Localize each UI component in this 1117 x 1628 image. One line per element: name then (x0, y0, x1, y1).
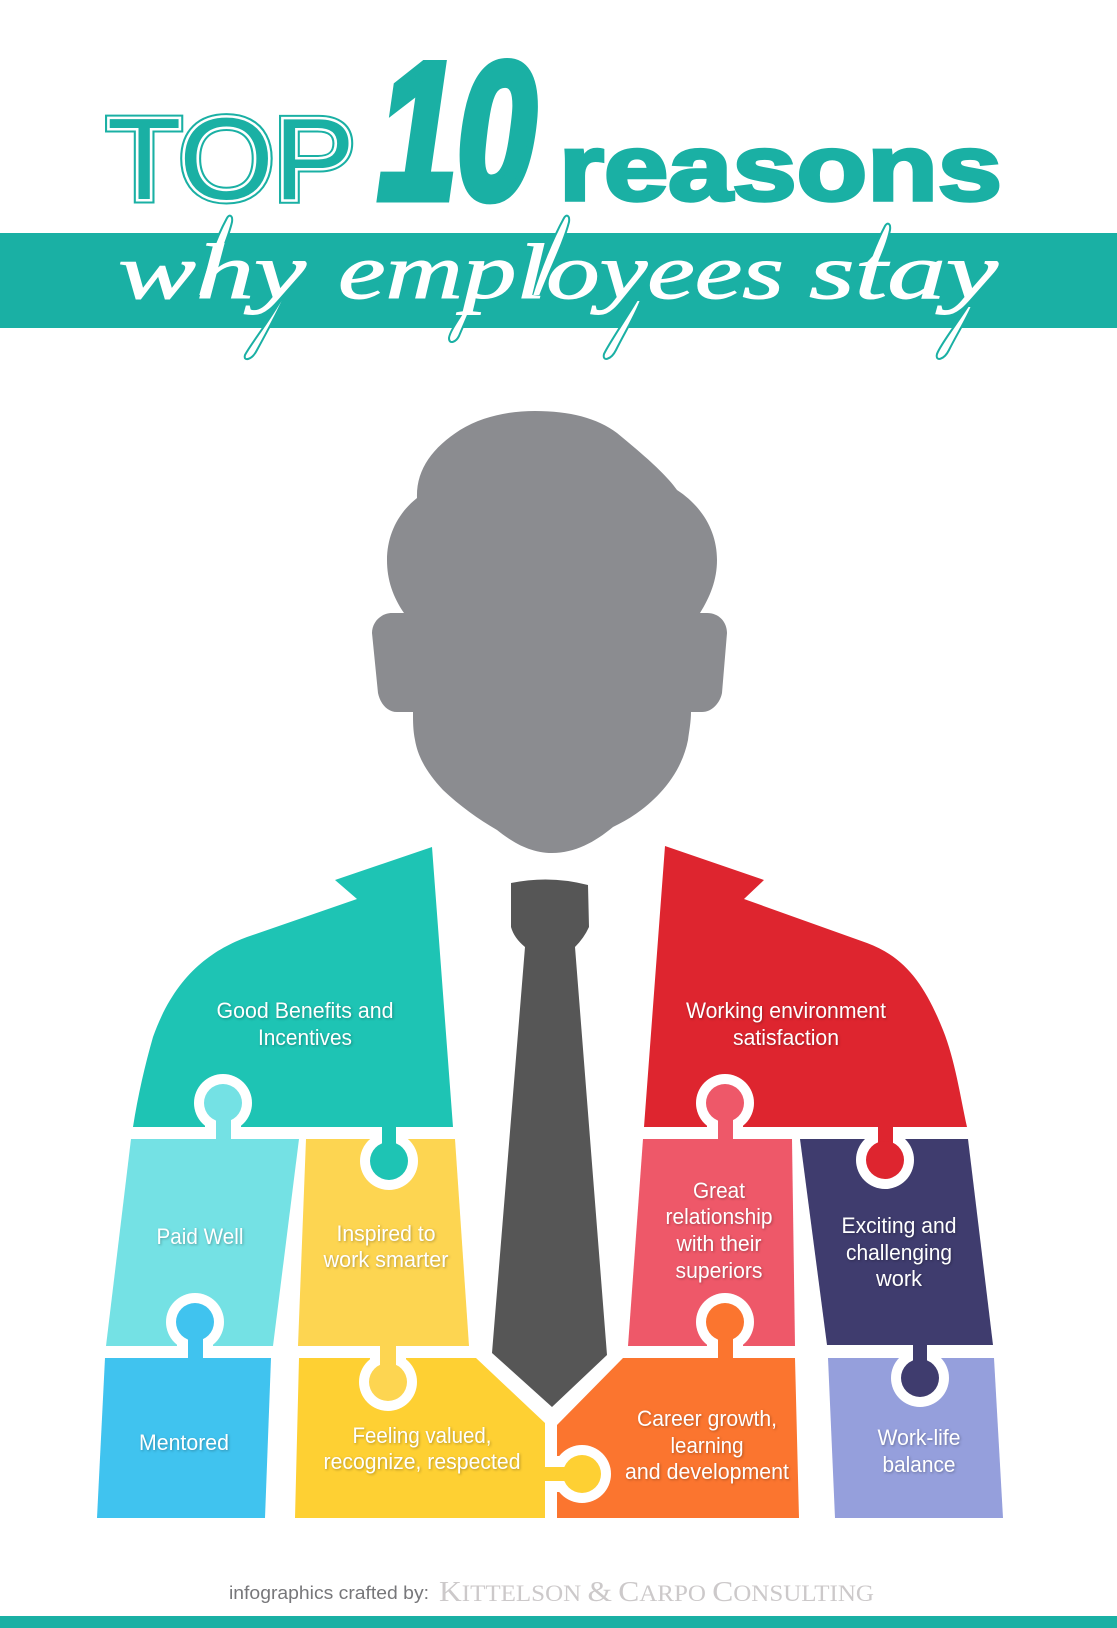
label: paid well: Paid Well (156, 1224, 244, 1249)
puzzle tab: exciting into work-life (891, 1345, 949, 1407)
subtitle: why employees stay (118, 228, 999, 315)
head silhouette (372, 411, 727, 853)
puzzle tab: inspired into feeling (359, 1346, 417, 1411)
label: career growth, learning and development: learning (670, 1433, 744, 1458)
puzzle tab: red into exciting (856, 1127, 914, 1189)
title: TOP: TOP (107, 94, 355, 224)
label: good benefits and incentives: Good Benefits and (216, 998, 394, 1023)
label: feeling valued, recognize, respected: recognize, respected (324, 1449, 520, 1474)
panel: paid well (106, 1074, 299, 1346)
label: career growth, learning and development (625, 1406, 789, 1484)
decorative script swashes on subtitle (198, 216, 972, 359)
label: career growth, learning and development: Career growth, (637, 1406, 777, 1431)
title: TOP: TOP (107, 94, 355, 224)
subtitle: why employees stay: employees (338, 228, 784, 315)
subtitle: why employees stay: why (118, 228, 307, 315)
label: mentored: Mentored (139, 1430, 229, 1455)
panel: working environment satisfaction (644, 846, 967, 1189)
label: working environment satisfaction (686, 998, 886, 1050)
label: great relationship with their superiors: Great (693, 1178, 745, 1203)
label: feeling valued, recognize, respected (324, 1423, 520, 1474)
label: career growth, learning and development: and development (625, 1459, 789, 1484)
subtitle: why employees stay: stay (809, 228, 999, 315)
label: inspired to work smarter (323, 1221, 448, 1272)
label: exciting and challenging work: challenging (846, 1240, 952, 1265)
footer credit: KITTELSON & CARPO CONSULTING (439, 1576, 874, 1608)
label: feeling valued, recognize, respected: Feeling valued, (352, 1423, 492, 1448)
panel: work-life balance (828, 1358, 1003, 1518)
footer credit (229, 1576, 874, 1608)
label: work-life balance: Work-life (878, 1425, 960, 1450)
teal title band (0, 233, 1117, 328)
label: good benefits and incentives (216, 998, 394, 1050)
panel: good benefits and incentives (133, 847, 453, 1190)
puzzle tab: feeling into career (545, 1445, 611, 1503)
panel: career growth, learning and development (557, 1293, 799, 1518)
panel: great relationship with their superiors (628, 1074, 795, 1346)
label: work-life balance (878, 1425, 960, 1477)
necktie (492, 879, 607, 1407)
puzzle tab: paid into green (194, 1074, 252, 1139)
footer bar (0, 1616, 1117, 1628)
label: exciting and challenging work (842, 1213, 956, 1291)
panel: mentored (97, 1293, 271, 1518)
label: exciting and challenging work: Exciting and (842, 1213, 956, 1238)
puzzle tab: green into inspired (360, 1127, 418, 1190)
label: inspired to work smarter: Inspired to (336, 1221, 436, 1246)
label: good benefits and incentives: Incentives (258, 1025, 352, 1050)
title: 10: 10 (378, 23, 536, 240)
label: great relationship with their superiors: superiors (676, 1258, 762, 1283)
panel: inspired to work smarter (298, 1139, 469, 1411)
label: inspired to work smarter: work smarter (323, 1247, 448, 1272)
label: exciting and challenging work: work (875, 1266, 923, 1291)
puzzle tab: career into great (696, 1293, 754, 1358)
title: TOP: TOP (107, 94, 355, 224)
label: great relationship with their superiors (666, 1178, 772, 1283)
label: great relationship with their superiors: relationship (666, 1204, 772, 1229)
panel: exciting and challenging work (800, 1139, 993, 1407)
label: working environment satisfaction: satisfaction (733, 1025, 839, 1050)
footer credit: infographics crafted by: (229, 1583, 429, 1603)
label: work-life balance: balance (882, 1452, 956, 1477)
puzzle tab: mentored into paid (166, 1293, 224, 1358)
label: great relationship with their superiors: with their (676, 1231, 762, 1256)
puzzle tab: great into red (696, 1074, 754, 1139)
label: working environment satisfaction: Working environment (686, 998, 886, 1023)
panel: feeling valued, recognize, respected (295, 1358, 611, 1518)
title: reasons: reasons (559, 115, 1002, 220)
